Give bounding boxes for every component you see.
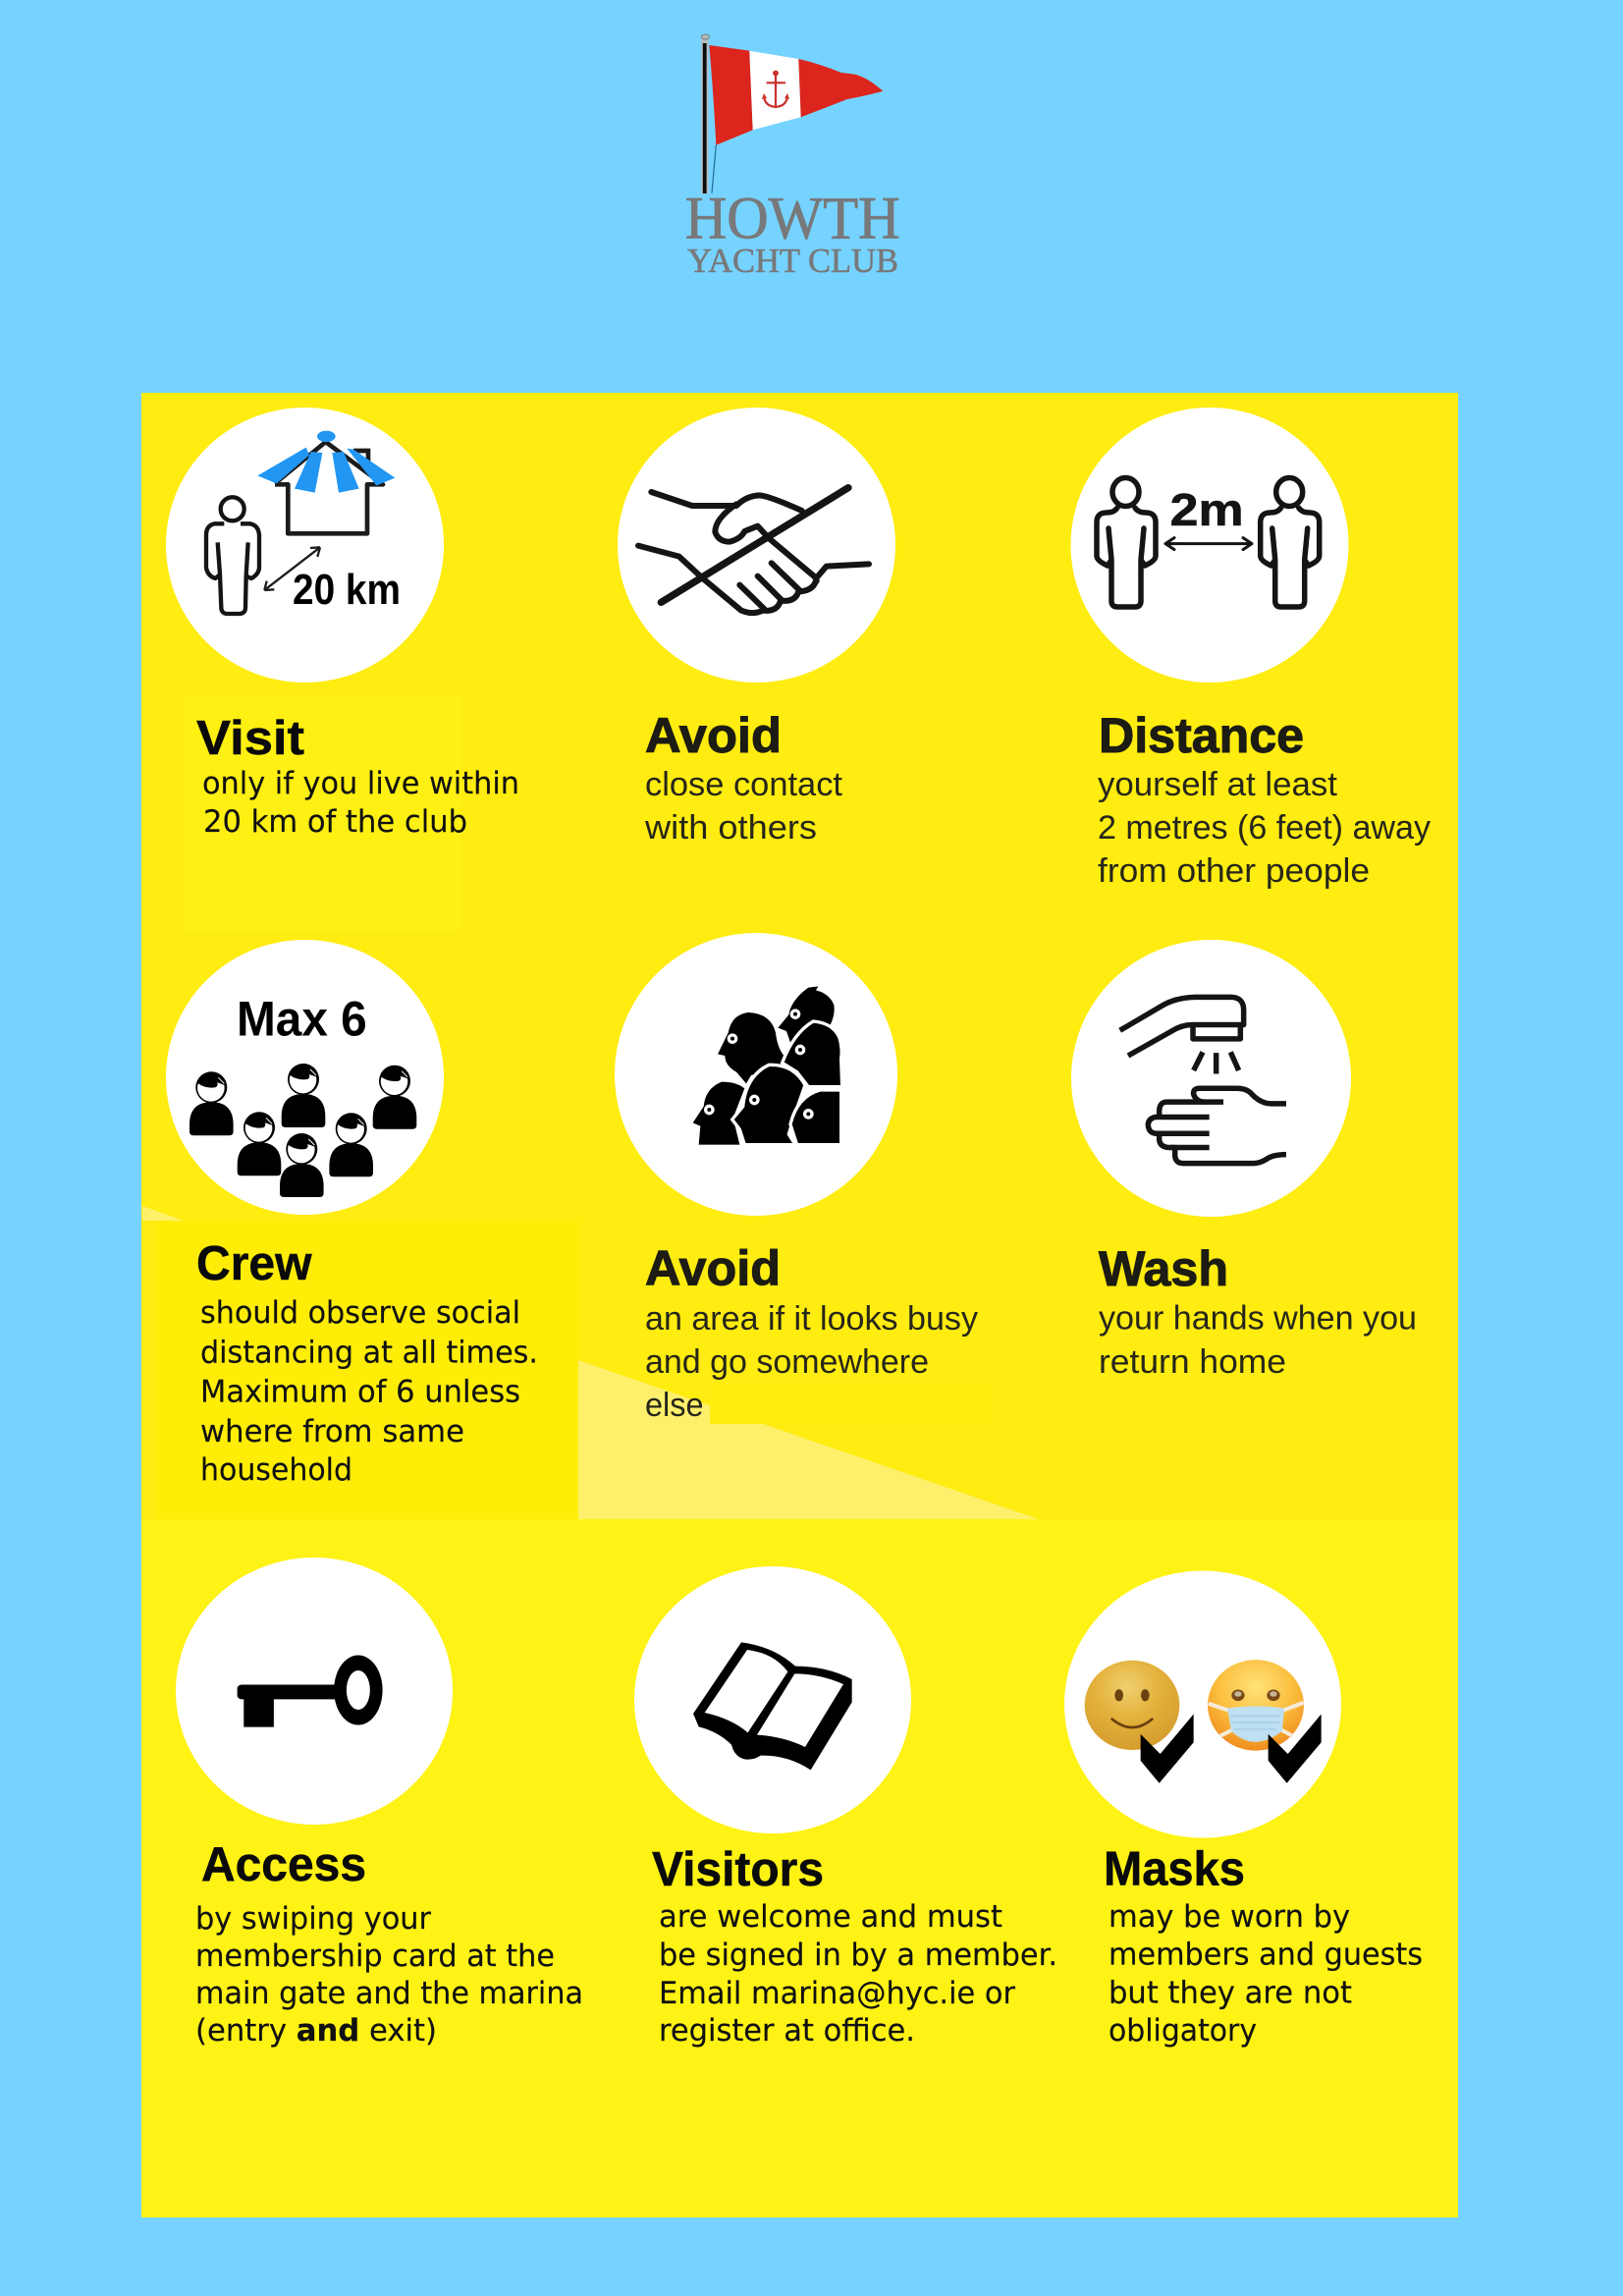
- logo wordmark: YACHT CLUB: YACHT CLUB: [687, 242, 898, 280]
- icon: max 6 people: Max 6: [237, 992, 367, 1047]
- card: Avoid close contact: [618, 408, 895, 847]
- text: Distance description: 2 metres (6 feet) away: [1098, 809, 1431, 847]
- text: close contact: close contact: [645, 766, 843, 803]
- text: Masks description: may be worn by: [1109, 1899, 1350, 1935]
- text: busy area description: and go somewhere: [645, 1343, 929, 1381]
- icon: open book: [634, 1566, 911, 1833]
- icon: house within 20 km: [166, 408, 444, 683]
- icon: crowd of people: [615, 933, 897, 1216]
- card: Visit: [166, 408, 519, 840]
- text: Masks description: obligatory: [1109, 2013, 1257, 2049]
- text: Access description: membership card at the: [195, 1939, 555, 1974]
- text: Access description: [195, 1901, 583, 2049]
- card: Avoid busy areas: [615, 933, 978, 1424]
- card: Access: [176, 1558, 583, 2049]
- icon: smiling and masked faces with checks: [1064, 1571, 1341, 1838]
- icon: two people 2m apart: 2m: [1170, 484, 1244, 535]
- text: busy area description: [645, 1300, 978, 1424]
- text: busy area description: else: [645, 1387, 703, 1424]
- text: Visit description: only if you live within: [202, 766, 519, 801]
- text: Crew description: Maximum of 6 unless: [200, 1375, 520, 1410]
- text: Crew description: where from same: [200, 1414, 464, 1449]
- heading: Masks: Masks: [1104, 1842, 1245, 1895]
- card: Masks: [1064, 1571, 1423, 2049]
- text: Crew description: should observe social: [200, 1295, 520, 1331]
- card: Wash: [1071, 940, 1417, 1381]
- text: Access description: (entry and exit): [195, 2013, 437, 2049]
- text: Wash description: [1099, 1300, 1417, 1381]
- text: Visitors description: are welcome and must: [659, 1899, 1002, 1935]
- text: Distance description: from other people: [1098, 852, 1370, 890]
- heading: Distance: Distance: [1099, 708, 1304, 763]
- panel: yellow background: [141, 393, 1458, 2217]
- text: Visit description: 20 km of the club: [203, 804, 467, 840]
- text: close contact: with others: [644, 809, 817, 847]
- text: Crew description: household: [200, 1452, 352, 1488]
- text: close contact: [644, 766, 843, 847]
- text: Visitors description: [659, 1899, 1057, 2049]
- text: Masks description: but they are not: [1109, 1976, 1352, 2011]
- logo wordmark: HOWTH: HOWTH: [685, 187, 900, 252]
- text: busy area description: an area if it looks busy: [645, 1300, 978, 1338]
- text: Visitors description: register at office.: [659, 2013, 915, 2049]
- logo: Howth Yacht Club: [685, 34, 900, 280]
- icon: house within 20 km: 20 km: [293, 566, 401, 614]
- icon: max 6 people: [166, 940, 444, 1215]
- text: Crew description: [200, 1295, 538, 1488]
- text: Visit description: [202, 766, 519, 840]
- text: Visitors description: be signed in by a member.: [659, 1938, 1057, 1973]
- icon: tap and hand: [1071, 940, 1351, 1217]
- heading: Avoid: Avoid: [645, 708, 782, 763]
- icon: flag on pole: [701, 34, 883, 193]
- text: Wash description: your hands when you: [1099, 1300, 1417, 1338]
- text: Wash description: return home: [1099, 1343, 1286, 1381]
- heading: Crew: Crew: [196, 1237, 312, 1290]
- card: Distance: [1070, 408, 1431, 890]
- text: Crew description: distancing at all times.: [200, 1336, 538, 1371]
- heading: Wash: Wash: [1099, 1241, 1228, 1296]
- icon: crossed-out handshake: [618, 408, 895, 683]
- card: Visitors: [634, 1566, 1057, 2049]
- text: Access description: main gate and the marina: [195, 1976, 583, 2011]
- heading: Avoid: Avoid: [645, 1241, 781, 1296]
- heading: Visit: Visit: [196, 712, 304, 765]
- text: Distance description: [1098, 766, 1431, 890]
- text: Visitors description: Email marina@hyc.ie or: [659, 1976, 1015, 2011]
- icon: two people 2m apart: [1070, 408, 1349, 683]
- icon: key: [176, 1558, 453, 1825]
- text: Masks description: members and guests: [1109, 1937, 1423, 1972]
- text: Distance description: yourself at least: [1098, 766, 1338, 803]
- text: Masks description: [1109, 1899, 1423, 2049]
- heading: Access: Access: [201, 1838, 366, 1891]
- card: Crew: [166, 940, 538, 1488]
- text: Access description: by swiping your: [195, 1901, 431, 1937]
- heading: Visitors: Visitors: [652, 1843, 824, 1896]
